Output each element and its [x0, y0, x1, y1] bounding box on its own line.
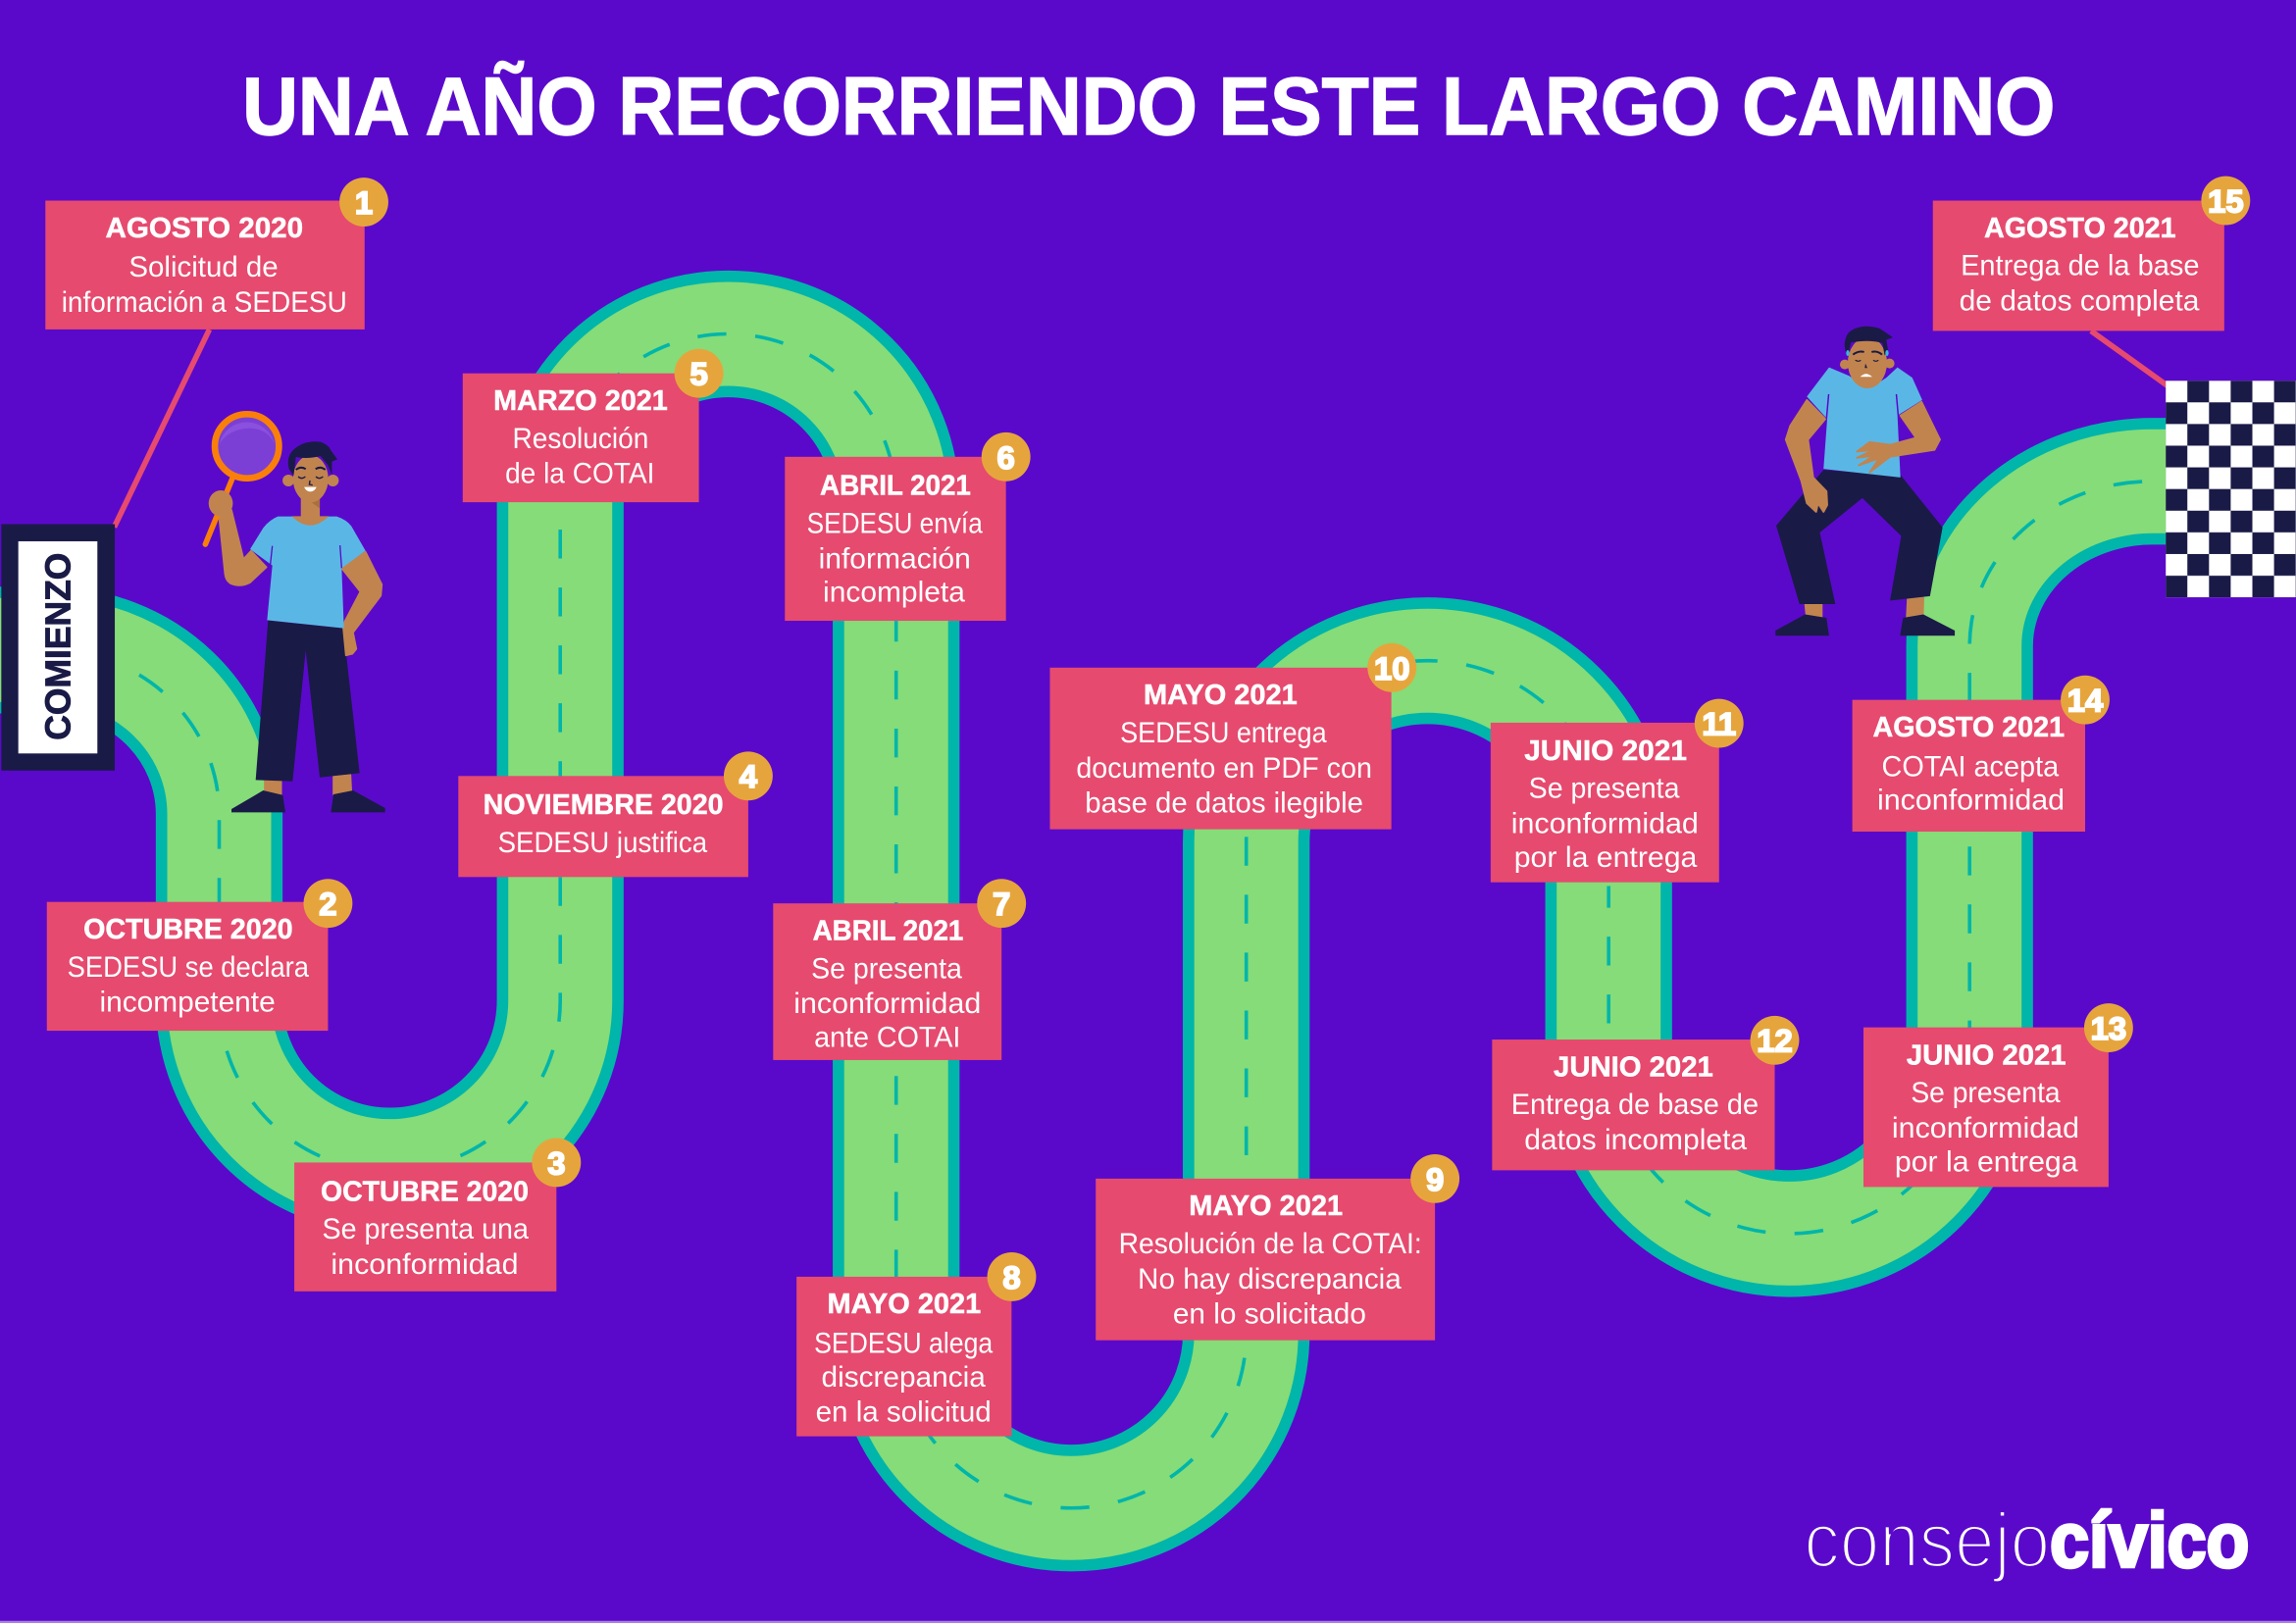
number badge [977, 879, 1026, 928]
description [68, 951, 309, 1019]
description: información a SEDESU [62, 286, 347, 319]
number badge [303, 879, 352, 928]
description: inconformidad [793, 988, 981, 1020]
number badge [339, 178, 388, 227]
step 12 card [1492, 1016, 1799, 1170]
description: inconformidad [331, 1248, 519, 1281]
step 11 card [1491, 699, 1744, 883]
step 14 card [1853, 676, 2110, 832]
date: OCTUBRE 2020 [321, 1176, 529, 1207]
date: AGOSTO 2021 [1873, 712, 2065, 743]
step 10 card [1049, 643, 1416, 830]
number badge: 10 [1374, 650, 1409, 686]
number badge: 2 [319, 886, 337, 922]
description: Entrega de la base [1961, 250, 2199, 282]
date: MAYO 2021 [1189, 1191, 1343, 1222]
description [1877, 750, 2065, 817]
date: ABRIL 2021 [813, 916, 963, 947]
description: incompetente [100, 987, 276, 1019]
step 13 card [1863, 1003, 2133, 1187]
number badge: 11 [1702, 705, 1736, 741]
number badge [532, 1139, 581, 1187]
description: incompleta [823, 577, 965, 609]
date: MAYO 2021 [828, 1289, 981, 1320]
number badge [2061, 676, 2110, 725]
description: en lo solicitado [1173, 1298, 1366, 1331]
date: ABRIL 2021 [820, 471, 971, 502]
date: JUNIO 2021 [1554, 1051, 1713, 1083]
date: JUNIO 2021 [1907, 1040, 2066, 1071]
description: SEDESU alega [814, 1328, 994, 1360]
description [1960, 250, 2200, 318]
number badge [1410, 1154, 1459, 1203]
description [322, 1213, 529, 1281]
number badge [1695, 699, 1744, 747]
description: discrepancia [822, 1361, 986, 1394]
description: Se presenta [811, 952, 962, 985]
description: Se presenta [1529, 773, 1680, 805]
description: SEDESU se declara [68, 951, 309, 984]
description: COTAI acepta [1881, 750, 2060, 783]
number badge: 15 [2208, 182, 2244, 219]
description: base de datos ilegible [1085, 787, 1363, 820]
number badge: 3 [547, 1144, 565, 1181]
description: SEDESU envía [807, 507, 983, 539]
description: por la entrega [1514, 841, 1698, 874]
description: SEDESU justifica [498, 827, 707, 859]
step 6 card [785, 432, 1031, 621]
date: OCTUBRE 2020 [83, 914, 293, 945]
description: en la solicitud [816, 1396, 992, 1429]
number badge [1751, 1016, 1799, 1065]
character: tired man [1775, 327, 1955, 635]
description: de la COTAI [505, 458, 654, 490]
finish flag: checkered [2166, 380, 2296, 597]
description [1892, 1077, 2079, 1178]
number badge [988, 1252, 1036, 1301]
step 7 card [773, 879, 1026, 1060]
step 5 card [463, 349, 724, 502]
number badge [724, 751, 773, 800]
description [793, 952, 981, 1054]
description [807, 507, 983, 609]
description [1511, 773, 1699, 874]
description: inconformidad [1892, 1112, 2079, 1144]
number badge: 13 [2091, 1010, 2126, 1046]
number badge [2201, 177, 2250, 225]
description: Resolución de la COTAI: [1119, 1228, 1422, 1260]
number badge: 4 [740, 758, 758, 794]
date: MAYO 2021 [1144, 680, 1298, 711]
number badge: 6 [997, 439, 1015, 476]
description [505, 423, 654, 490]
description [1076, 717, 1372, 820]
number badge: 12 [1757, 1023, 1793, 1059]
step 3 card [294, 1139, 581, 1292]
number badge [675, 349, 724, 398]
description: Se presenta una [322, 1213, 529, 1245]
description: documento en PDF con [1076, 752, 1372, 785]
description: ante COTAI [814, 1022, 960, 1054]
step 8 card [796, 1252, 1036, 1437]
number badge [2084, 1003, 2133, 1052]
description: No hay discrepancia [1138, 1263, 1402, 1295]
step 4 card [458, 751, 773, 877]
winding road [0, 333, 2182, 1508]
start sign: COMIENZO: COMIENZO [39, 553, 78, 740]
description: Solicitud de [128, 251, 279, 283]
description: SEDESU entrega [1120, 717, 1327, 749]
description: Resolución [513, 423, 648, 455]
date: AGOSTO 2021 [1984, 213, 2176, 244]
step 9 card [1096, 1154, 1459, 1341]
date: AGOSTO 2020 [105, 213, 303, 244]
number badge: 9 [1426, 1161, 1444, 1197]
description: inconformidad [1511, 808, 1699, 840]
number badge: 8 [1002, 1259, 1021, 1295]
description: datos incompleta [1524, 1124, 1748, 1156]
description: por la entrega [1895, 1145, 2078, 1178]
step 2 card [47, 879, 352, 1031]
connector line: finish flag to step 15 [2091, 330, 2168, 386]
start sign: COMIENZO [1, 524, 115, 771]
description: información [819, 542, 971, 575]
number badge: 14 [2067, 683, 2104, 719]
title: UNA AÑO RECORRIENDO ESTE LARGO CAMINO [242, 60, 2055, 152]
description [62, 251, 347, 319]
description: Entrega de base de [1511, 1089, 1759, 1121]
description: inconformidad [1877, 785, 2065, 817]
description [1119, 1228, 1422, 1331]
number badge [1367, 643, 1416, 692]
step 1 card [45, 178, 388, 330]
date: JUNIO 2021 [1524, 735, 1687, 767]
description [814, 1328, 994, 1429]
description: Se presenta [1911, 1077, 2061, 1109]
character: man with magnifying glass [205, 414, 385, 812]
description: de datos completa [1960, 285, 2200, 318]
logo: consejo cívico: consejo [1804, 1496, 2050, 1584]
date: NOVIEMBRE 2020 [484, 789, 724, 821]
logo: consejo cívico: cívico [2050, 1496, 2249, 1584]
logo: consejo cívico [1804, 1496, 2249, 1584]
number badge [982, 432, 1031, 482]
description [1511, 1089, 1759, 1156]
number badge: 7 [993, 886, 1010, 922]
number badge: 5 [689, 356, 708, 392]
connector line: start sign to step 1 [114, 330, 209, 527]
number badge: 1 [355, 184, 373, 221]
date: MARZO 2021 [493, 385, 668, 417]
step 15 card [1933, 177, 2250, 330]
